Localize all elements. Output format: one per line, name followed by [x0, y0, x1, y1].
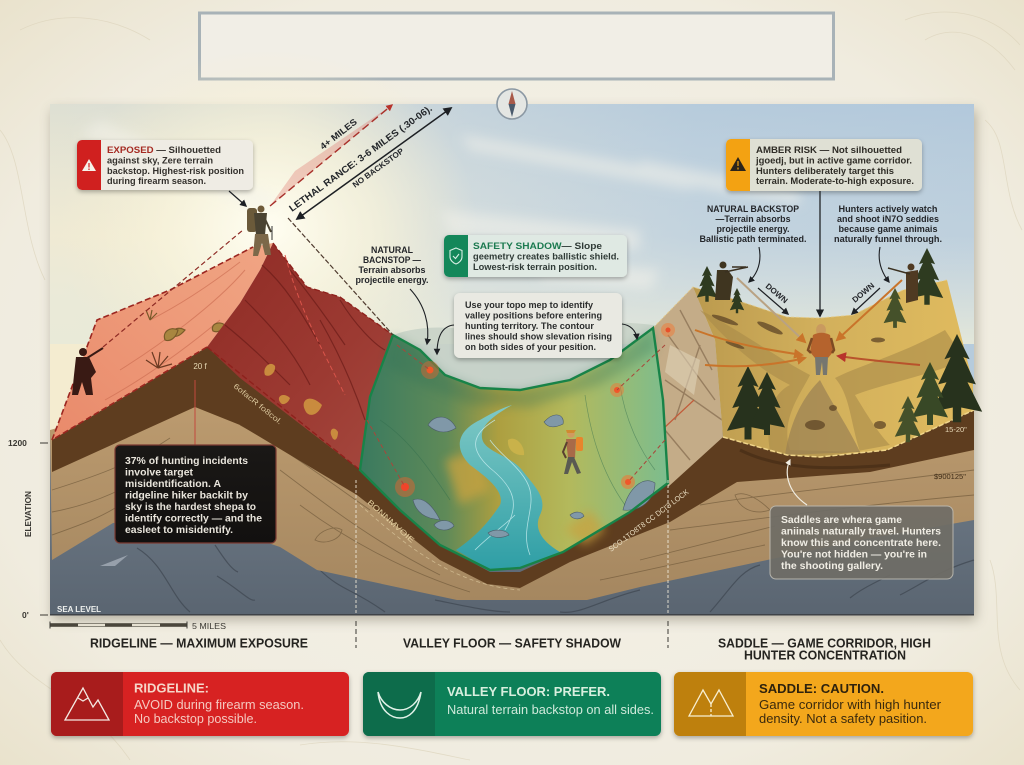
callout: safety shadow: SAFETY SHADOW — Slope: [473, 241, 602, 252]
annotation: hunters watch: [834, 204, 942, 245]
elevation axis: [8, 438, 48, 620]
figure: right saddle hunter: [888, 264, 918, 303]
callout: exposed: during firearm season.: [107, 176, 206, 187]
contour lines: [380, 385, 655, 505]
icon: dry grass: [264, 364, 338, 440]
annotation: natural backstop right: projectile energy.: [716, 224, 790, 235]
saddle left cliff: [653, 287, 723, 487]
sight lines: NO BACKSTOP: [351, 146, 406, 190]
elevation axis: ELEVATION: [23, 491, 33, 537]
lethal range arrow: [297, 108, 451, 219]
annotation arrows: saddle: DOWN: [764, 282, 790, 305]
annotation: natural backstop right: [700, 204, 806, 245]
elevation axis: 1200: [8, 438, 27, 448]
callout: safety shadow: geemetry creates ballistic shield.: [473, 252, 619, 262]
panel shadow: [52, 110, 976, 620]
dotted zone dividers on panel: [356, 480, 668, 615]
annotation: natural backstop left: projectile energy.: [356, 275, 428, 286]
layer labels: $900125": [934, 472, 966, 481]
annotation: natural backstop left: NATURAL: [371, 245, 413, 256]
card: ridgeline avoid: [51, 672, 349, 736]
green border: [360, 328, 668, 570]
callout: misidentification statistic: identify correctly — and the: [125, 514, 262, 524]
annotation arrows: valley: [410, 289, 637, 354]
ridge dashed outline: [52, 247, 253, 440]
tan strata layer: [50, 390, 974, 600]
callout: safety shadow: [444, 235, 627, 277]
zone dividers below panel: [356, 621, 668, 648]
card: saddle caution: Game corridor with high hunter: [759, 697, 942, 712]
card: ridgeline avoid: No backstop possible.: [134, 711, 257, 726]
callout: misidentification statistic: ridgeline hiker backilt by: [125, 490, 248, 502]
layer labels: 6ofacR fo8col.: [232, 382, 284, 426]
figure: saddle hiker: [808, 324, 834, 375]
grass: [445, 450, 605, 545]
panel: terrain cross-section illustration: [50, 48, 982, 616]
annotation: natural backstop left: Terrain absorbs: [358, 265, 426, 276]
figure: left saddle hunter: [715, 262, 748, 300]
callout: topo map tip: valley positions before entering: [465, 310, 602, 322]
callout: topo map tip: lines should show slevation rising: [465, 332, 612, 342]
callout: saddles shooting gallery: Saddles are whera game: [781, 515, 902, 526]
callout: exposed: [77, 140, 253, 190]
callout: topo map tip: Use your topo mep to identify: [465, 300, 594, 311]
arrow: amber to saddle: [819, 191, 821, 316]
trees: [697, 248, 982, 442]
callout: saddles shooting gallery: the shooting gallery.: [781, 561, 883, 572]
heading: saddle section: SADDLE — GAME CORRIDOR, HIGH: [718, 636, 931, 650]
icon: desert shrubs: [146, 310, 225, 368]
arrow: exposed to hiker: [229, 191, 246, 206]
callout: saddles shooting gallery: [770, 460, 953, 579]
callout: amber risk: terrain. Moderate-to-high exposure.: [756, 176, 914, 187]
hunter sight line: [103, 230, 243, 347]
annotation: hunters watch: and shoot iN7O seddies: [837, 214, 939, 225]
callout: saddles shooting gallery: know this and concentrate here.: [781, 538, 941, 549]
sight lines: 4+ MILES: [318, 117, 359, 152]
annotation arrows: saddle: DOWN: [851, 281, 876, 305]
annotation: natural backstop right: —Terrain absorbs: [716, 214, 790, 225]
ridgeline left face: [52, 243, 273, 440]
callout: amber risk: [726, 139, 922, 191]
rocks: [413, 415, 655, 537]
title box: [200, 13, 834, 79]
layer labels: [57, 362, 967, 614]
annotation: natural backstop left: [356, 245, 428, 286]
callout: amber risk: AMBER RISK — Not silhouetted: [756, 145, 902, 156]
callout: safety shadow: Lowest-risk terrain position.: [473, 262, 597, 273]
heading: saddle section: [718, 636, 931, 662]
card: ridgeline avoid: AVOID during firearm season.: [134, 697, 304, 712]
backstop sight line: [288, 218, 393, 335]
panel bottom edge: [50, 614, 974, 616]
ridgeline red face: [207, 243, 393, 470]
sky: [50, 48, 974, 615]
annotation: natural backstop right: Ballistic path terminated.: [700, 234, 806, 245]
annotation: hunters watch: Hunters actively watch: [838, 204, 938, 215]
heading: ridgeline section: RIDGELINE — MAXIMUM EXPOSURE: [90, 636, 308, 650]
card: saddle caution: [674, 672, 973, 736]
callout: exposed: backstop. Highest-risk position: [107, 166, 244, 177]
callout: misidentification statistic: [115, 445, 276, 543]
callout: amber risk: Hunters deliberately target this: [756, 166, 894, 177]
heading: saddle section: HUNTER CONCENTRATION: [744, 648, 906, 662]
icon: mountain: [65, 688, 109, 720]
callout: misidentification statistic: involve target: [125, 468, 194, 478]
annotation: natural backstop left: BACNSTOP —: [363, 255, 421, 266]
callout: topo map tip: on both sides of your pesition.: [465, 342, 596, 353]
saddle golden surface: [653, 280, 974, 458]
4+ miles wedge: [270, 105, 392, 206]
callout: amber risk: jgoedj, but in active game corridor.: [755, 156, 912, 166]
annotation: hunters watch: naturally funnel through.: [834, 234, 942, 245]
callout: misidentification statistic: easleet to misidentify.: [125, 525, 233, 536]
icon: mountain pass: [689, 690, 733, 716]
card: valley floor prefer: [363, 672, 661, 736]
figure: ridge hiker: [247, 206, 272, 256]
arrows toward saddle figure: [695, 278, 920, 366]
card: ridgeline avoid: RIDGELINE:: [134, 680, 209, 696]
card: saddle caution: density. Not a safety pasition.: [759, 711, 927, 726]
annotation arrows: saddle: [749, 247, 889, 314]
callout: topo map tip: [454, 293, 622, 358]
layer labels: 20 f: [193, 362, 207, 371]
layer labels: SCO.1TO8T8 CC DCI'3 LOCK: [607, 487, 690, 554]
rock base layer: [50, 430, 974, 615]
layer labels: SEA LEVEL: [57, 605, 101, 614]
callout: misidentification statistic: sky is the hardest shepa to: [125, 502, 256, 513]
brown topsoil layer: [52, 347, 974, 588]
callout: misidentification statistic: 37% of hunting incidents: [125, 456, 248, 467]
river: [456, 405, 560, 570]
distant hills behind valley: [393, 323, 660, 400]
sight lines: LETHAL RANCE: 3-6 MILES (.30-06).: [287, 103, 435, 214]
layer labels: 15-20": [945, 425, 967, 434]
annotation: hunters watch: because game animais: [838, 224, 938, 235]
elevation axis: 0': [22, 610, 29, 620]
heading: valley floor section: VALLEY FLOOR — SAFETY SHADOW: [403, 636, 622, 650]
callout: topo map tip: hunting territory. The contour: [465, 321, 594, 332]
card: valley floor prefer: VALLEY FLOOR: PREFER.: [447, 684, 610, 699]
callout: exposed: EXPOSED — Silhouetted: [107, 145, 221, 156]
compass: [497, 89, 527, 119]
callout: saddles shooting gallery: aniinals naturally travel. Hunters: [781, 526, 941, 538]
scale bar: 5 MILES: [192, 621, 226, 631]
card: valley floor prefer: Natural terrain backstop on all sides.: [447, 702, 654, 717]
callout: saddles shooting gallery: You're not hidden — you're in: [781, 550, 927, 560]
valley safety shadow zone: [360, 323, 675, 570]
icon: valley curve: [378, 692, 421, 718]
scale bar: [50, 621, 226, 631]
sight lines: [103, 103, 451, 347]
callout: misidentification statistic: misidentification. A: [125, 479, 221, 490]
impact markers: [395, 323, 675, 497]
card: saddle caution: SADDLE: CAUTION.: [759, 681, 884, 696]
callout: exposed: against sky, Zere terrain: [107, 156, 213, 166]
figure: left hunter: [72, 348, 103, 395]
annotation: natural backstop right: NATURAL BACKSTOP: [707, 204, 800, 215]
layer labels: BONNMVOIE: [366, 498, 416, 545]
figure: valley hiker: [563, 430, 583, 474]
